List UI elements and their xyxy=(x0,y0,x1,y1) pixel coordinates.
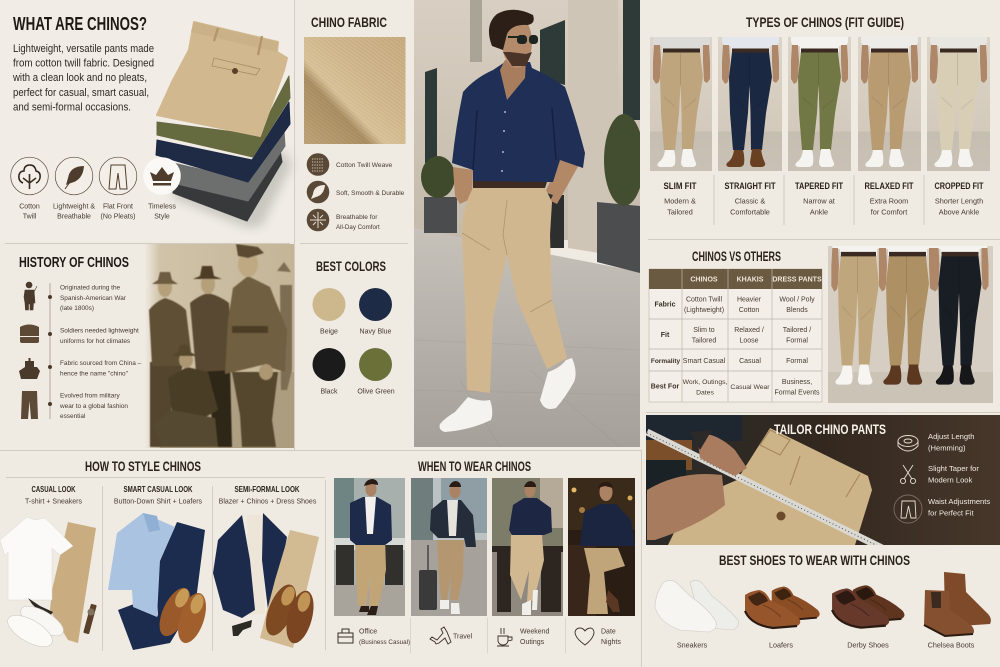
comparison table: Blends xyxy=(786,307,808,314)
comparison table: Work, Outings, xyxy=(683,379,727,386)
panel: best shoes xyxy=(655,552,991,650)
comparison table: Smart Casual xyxy=(683,358,726,365)
description: tapered: Narrow at xyxy=(803,196,835,206)
subhead: blazer chinos dress shoes: Blazer + Chinos + Dress Shoes xyxy=(219,498,317,506)
text: adjust length: (Hemming) xyxy=(928,443,966,452)
comparison table: Wool / Poly xyxy=(779,296,815,304)
icon: flat front pants xyxy=(99,157,137,195)
fit: cropped xyxy=(927,37,990,171)
caption: flat front: (No Pleats) xyxy=(100,214,136,220)
text: slight taper: Slight Taper for xyxy=(928,464,979,473)
comparison table: CHINOS xyxy=(690,276,718,284)
label: olive green: Olive Green xyxy=(357,388,395,396)
label: loafers: Loafers xyxy=(769,640,793,650)
comparison table: KHAKIS xyxy=(737,276,764,284)
outfit: semi-formal flat lay xyxy=(213,513,319,648)
hero photo: man in navy shirt and beige chinos xyxy=(414,0,644,447)
timeline dot 1 xyxy=(48,295,52,299)
comparison table: Formality xyxy=(651,358,681,365)
swatch: olive green xyxy=(359,348,392,381)
timeline dot 2 xyxy=(48,332,52,336)
divider column one xyxy=(102,486,103,651)
text: waist adjustments: for Perfect Fit xyxy=(928,508,974,518)
text: evolved from military: Evolved from military xyxy=(60,392,120,400)
label: date nights: Date xyxy=(601,628,616,636)
image: three pants comparison xyxy=(828,239,993,403)
text: soldiers needed: uniforms for hot climates xyxy=(60,338,130,345)
label: cotton twill weave: Cotton Twill Weave xyxy=(336,162,393,169)
description: cropped: Shorter Length xyxy=(935,196,983,206)
timeline line xyxy=(50,283,51,419)
heading: best shoes: BEST SHOES TO WEAR WITH CHINOS xyxy=(719,552,910,568)
text: fabric from china: Fabric sourced from China – xyxy=(60,360,141,367)
heading: casual look: CASUAL LOOK xyxy=(32,484,76,494)
caption: flat front: Flat Front xyxy=(103,204,133,210)
swatch: black xyxy=(312,348,346,381)
timeline dot 3 xyxy=(48,365,52,369)
image: sepia soldiers xyxy=(145,244,294,448)
image: stack of folded chinos xyxy=(156,22,292,228)
text: evolved from military: wear to a global fashion xyxy=(59,403,128,410)
divider column two xyxy=(212,486,213,651)
description: slim: Tailored xyxy=(667,208,693,216)
label: weekend outings: Outings xyxy=(520,639,545,646)
icon: ship xyxy=(19,358,40,379)
image: twill fabric swatch xyxy=(304,37,406,144)
label: sneakers: Sneakers xyxy=(677,640,708,650)
icon: briefcase xyxy=(338,629,353,643)
text block: definition: with a clean look and no pleats, xyxy=(12,72,147,84)
panel: best colors xyxy=(312,258,395,396)
caption: timeless style: Style xyxy=(154,214,170,220)
comparison table: DRESS PANTS xyxy=(772,276,822,284)
text block: definition: and semi-formal occasions. xyxy=(13,102,131,114)
text block: definition: Lightweight, versatile pants made xyxy=(13,43,154,55)
text: slight taper: Modern Look xyxy=(928,475,973,484)
comparison table: Fit xyxy=(661,332,670,339)
text: spanish-american war: (late 1800s) xyxy=(60,305,94,312)
icon: heart xyxy=(575,628,594,645)
panel: tailor chino pants xyxy=(646,415,1000,548)
comparison table: Cotton xyxy=(739,307,759,314)
text: spanish-american war: Originated during the xyxy=(60,284,120,292)
photo: office xyxy=(334,478,405,616)
heading: fit guide: TYPES OF CHINOS (FIT GUIDE) xyxy=(746,14,904,30)
text: fabric from china: hence the name "chino" xyxy=(60,370,129,377)
divider: weekend xyxy=(487,618,488,653)
comparison table: (Lightweight) xyxy=(684,307,724,314)
label: cropped fit: CROPPED FIT xyxy=(934,181,984,192)
shoe: chelsea boots xyxy=(924,572,991,636)
comparison table: Tailored / xyxy=(783,327,811,334)
icon: soft leaf xyxy=(307,181,329,203)
heading: how to style chinos: HOW TO STYLE CHINOS xyxy=(85,459,201,474)
comparison table: Fabric xyxy=(654,302,676,308)
label: office: Office xyxy=(359,628,377,636)
subhead: tshirt sneakers: T-shirt + Sneakers xyxy=(25,498,82,506)
panel: history of chinos xyxy=(19,244,294,448)
description: straight: Classic & xyxy=(735,196,765,206)
text block: definition: from cotton twill fabric. Designed xyxy=(13,58,154,70)
caption: cotton twill: Twill xyxy=(23,214,37,220)
shoe: sneakers xyxy=(655,580,738,632)
comparison table: Heavier xyxy=(737,296,761,304)
icon: feather xyxy=(55,157,93,195)
text: spanish-american war: Spanish-American War xyxy=(60,295,127,302)
icon: twill weave xyxy=(307,153,329,176)
comparison table: Formal xyxy=(786,337,808,344)
outfit: casual flat lay xyxy=(0,517,97,653)
icon: soldier xyxy=(24,282,37,310)
label: beige: Beige xyxy=(320,328,338,336)
shoe: loafers xyxy=(745,587,820,628)
panel: types of chinos xyxy=(650,14,990,216)
icon: pants xyxy=(21,391,38,419)
photo: travel xyxy=(411,478,487,616)
panel: how to style chinos xyxy=(0,459,319,653)
label: slim fit: SLIM FIT xyxy=(664,181,697,192)
comparison table: Business, xyxy=(782,379,812,386)
label: soft smooth durable: Soft, Smooth & Durable xyxy=(336,190,405,197)
description: relaxed: for Comfort xyxy=(871,208,907,216)
label: navy blue: Navy Blue xyxy=(360,328,392,336)
caption: lightweight and breathable: Lightweight & xyxy=(53,204,95,210)
text: waist adjustments: Waist Adjustments xyxy=(928,497,990,506)
comparison table: Dates xyxy=(696,389,714,396)
heading: smart casual look: SMART CASUAL LOOK xyxy=(124,484,193,494)
image: tailoring background xyxy=(646,415,1000,548)
comparison table: Best For xyxy=(651,384,679,390)
heading: tailor chino pants: TAILOR CHINO PANTS xyxy=(774,421,886,437)
heading: semi-formal look: SEMI-FORMAL LOOK xyxy=(234,484,300,494)
comparison table: Loose xyxy=(739,337,759,344)
swatch: navy blue xyxy=(359,288,392,321)
caption: lightweight and breathable: Breathable xyxy=(57,214,91,220)
description: slim: Modern & xyxy=(664,196,696,206)
icon: waist adjustment pants xyxy=(894,495,922,523)
label: date nights: Nights xyxy=(601,639,621,646)
label: relaxed fit: RELAXED FIT xyxy=(864,181,914,192)
description: relaxed: Extra Room xyxy=(870,196,908,206)
label: breathable for all-day comfort: All-Day Comfort xyxy=(336,224,380,231)
comparison table: Cotton Twill xyxy=(686,296,722,304)
text: soldiers needed: Soldiers needed lightweight xyxy=(60,328,139,334)
icon: scissors xyxy=(900,465,916,484)
heading: what are chinos: WHAT ARE CHINOS? xyxy=(13,14,147,34)
icon: lightweight uniform stack xyxy=(20,324,39,343)
text: evolved from military: essential xyxy=(60,413,85,420)
caption: timeless style: Timeless xyxy=(148,204,176,210)
label: breathable for all-day comfort: Breathable for xyxy=(336,214,377,221)
panel: chinos vs others xyxy=(649,239,993,403)
description: straight: Comfortable xyxy=(730,208,770,216)
photo: date night xyxy=(568,478,635,616)
shoe: derby xyxy=(832,585,904,628)
outfit: smart casual flat lay xyxy=(108,513,211,650)
comparison table: Slim to xyxy=(693,327,715,334)
description: tapered: Ankle xyxy=(810,208,828,216)
comparison table: Formal xyxy=(786,358,808,365)
panel: when to wear chinos xyxy=(334,459,635,653)
text: adjust length: Adjust Length xyxy=(928,432,974,441)
divider: date xyxy=(565,618,566,653)
timeline dot 4 xyxy=(48,402,52,406)
fit: relaxed xyxy=(858,37,921,171)
heading: chinos vs others: CHINOS VS OTHERS xyxy=(692,249,781,264)
photo: weekend xyxy=(492,478,563,616)
panel: what are chinos xyxy=(0,0,294,241)
caption: cotton twill: Cotton xyxy=(19,204,40,210)
heading: chino fabric: CHINO FABRIC xyxy=(311,14,387,30)
icon: coffee cup xyxy=(497,628,512,646)
panel: chino fabric xyxy=(304,14,406,231)
text block: definition: perfect for casual, smart casual, xyxy=(13,87,149,99)
text block: definition xyxy=(12,43,154,114)
heading: history of chinos: HISTORY OF CHINOS xyxy=(19,255,129,271)
label: chelsea boots: Chelsea Boots xyxy=(928,640,975,650)
label: derby shoes: Derby Shoes xyxy=(847,640,889,650)
fit: slim xyxy=(650,37,712,171)
fit: straight xyxy=(718,37,782,171)
swatch: beige xyxy=(312,288,346,321)
icon: tape measure xyxy=(898,436,918,451)
comparison table: Casual xyxy=(739,358,761,365)
description: cropped: Above Ankle xyxy=(939,208,979,216)
label: office: (Business Casual) xyxy=(359,639,410,646)
label: black: Black xyxy=(320,388,338,396)
comparison table: Casual Wear xyxy=(730,384,770,391)
heading: when to wear chinos: WHEN TO WEAR CHINOS xyxy=(418,459,531,474)
label: travel: Travel xyxy=(453,634,473,640)
icon: cotton xyxy=(11,157,48,195)
label: weekend outings: Weekend xyxy=(520,628,549,636)
icon: crown xyxy=(143,157,181,195)
comparison table: Relaxed / xyxy=(734,327,764,334)
comparison table: Tailored xyxy=(692,337,716,344)
heading: best colors: BEST COLORS xyxy=(316,258,386,274)
fit: tapered xyxy=(788,37,851,171)
subhead: shirt loafers: Button-Down Shirt + Loafers xyxy=(114,498,203,506)
divider: travel xyxy=(410,618,411,653)
comparison table: Formal Events xyxy=(774,389,820,396)
icon: plane xyxy=(430,627,451,644)
label: tapered fit: TAPERED FIT xyxy=(795,181,843,192)
comparison table xyxy=(649,269,822,402)
icon: breathable xyxy=(307,209,329,231)
label: straight fit: STRAIGHT FIT xyxy=(724,181,776,192)
